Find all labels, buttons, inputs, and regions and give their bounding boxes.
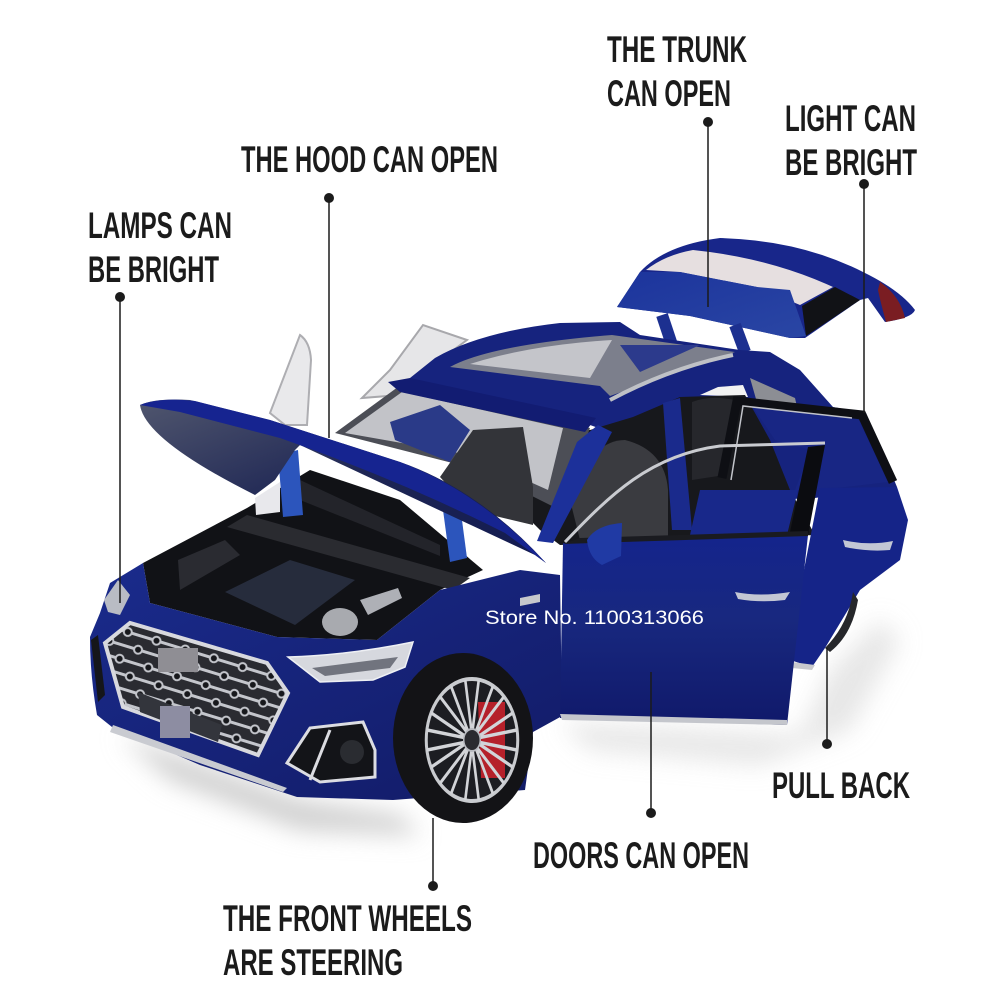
rear door panel bbox=[790, 487, 908, 667]
callout: doors can open: DOORS CAN OPEN bbox=[533, 835, 749, 876]
B pillar bbox=[663, 398, 692, 530]
headlight bbox=[288, 642, 413, 682]
open left door glass bbox=[270, 325, 467, 425]
left bumper vent bbox=[91, 635, 105, 702]
callout: the front wheels are steering: ARE STEERING bbox=[223, 942, 403, 983]
rear door chrome sill bbox=[792, 662, 815, 670]
callout: lamps can be bright bbox=[88, 205, 232, 603]
front body bbox=[90, 563, 562, 800]
open trunk lid bbox=[617, 238, 915, 338]
rear side windows bbox=[700, 378, 800, 440]
door handle bbox=[735, 592, 790, 601]
callout: the trunk can open bbox=[607, 29, 747, 307]
ground shadow bbox=[120, 620, 900, 835]
blue body seen through rear door frame bbox=[748, 400, 888, 490]
callout: the front wheels are steering: THE FRONT WHEELS bbox=[223, 898, 472, 939]
A pillar bbox=[537, 425, 612, 543]
lower chrome strip bbox=[110, 725, 287, 792]
lower intake bbox=[287, 722, 375, 782]
callout: lamps can be bright: BE BRIGHT bbox=[88, 249, 219, 290]
callout: light can be bright: LIGHT CAN bbox=[785, 98, 916, 139]
rear seats bbox=[692, 398, 735, 480]
inner rear door panel bbox=[690, 490, 798, 535]
callout: light can be bright bbox=[785, 98, 917, 413]
open hood bbox=[140, 400, 546, 563]
callout: pull back bbox=[772, 648, 910, 806]
callout: light can be bright: BE BRIGHT bbox=[785, 142, 917, 183]
engine bay bbox=[143, 470, 483, 640]
callout: the trunk can open: CAN OPEN bbox=[607, 73, 731, 114]
callout: pull back: PULL BACK bbox=[772, 765, 910, 806]
badge bbox=[520, 594, 540, 606]
windshield header bbox=[388, 378, 596, 432]
front open door bbox=[560, 443, 825, 725]
roof bbox=[405, 322, 897, 500]
callout: the trunk can open: THE TRUNK bbox=[607, 29, 747, 70]
trunk struts bbox=[662, 315, 745, 352]
hood struts bbox=[278, 450, 467, 562]
callout: the hood can open bbox=[241, 139, 498, 438]
left lamp bbox=[104, 580, 130, 615]
callout: doors can open bbox=[533, 672, 749, 876]
rear tyre bbox=[825, 592, 858, 652]
callout: the front wheels are steering bbox=[223, 818, 472, 983]
callout: the hood can open: THE HOOD CAN OPEN bbox=[241, 139, 498, 180]
side mirror bbox=[587, 523, 622, 565]
callout: lamps can be bright: LAMPS CAN bbox=[88, 205, 232, 246]
interior cabin bbox=[395, 385, 815, 545]
windshield bbox=[335, 384, 590, 510]
front seats bbox=[440, 427, 668, 540]
front wheel bbox=[393, 653, 533, 823]
car illustration bbox=[90, 238, 915, 823]
rear door frame bbox=[722, 401, 893, 482]
whitish glass gap below hood bbox=[255, 482, 280, 515]
grille bbox=[105, 623, 288, 755]
rear door handle bbox=[843, 540, 893, 551]
store watermark: Store No. 1100313066 bbox=[485, 608, 704, 629]
